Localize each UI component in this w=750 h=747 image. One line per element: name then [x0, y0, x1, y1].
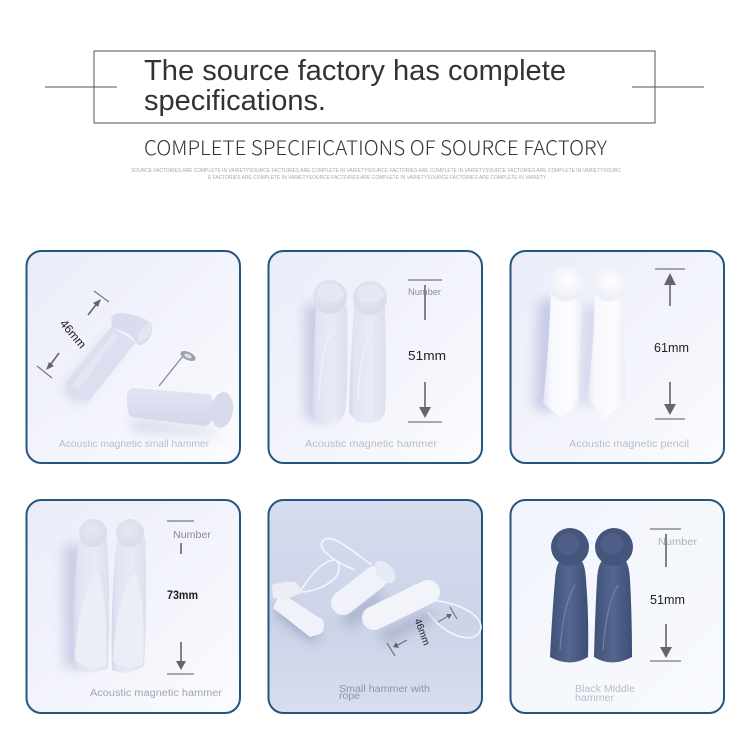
number label: Number — [173, 529, 211, 541]
header frame with side rules — [45, 51, 704, 123]
small descriptive text: SOURCE FACTORIES ARE COMPLETE IN VARIETYSOURCE FACTORIES ARE COMPLETE IN VARIETYSOURCE FACTORIES ARE COMPLETE IN VARIETYSOURCE FACTORIES ARE COMPLETE IN VARIETYSOURC — [131, 168, 621, 174]
icon: small hammer, angled — [62, 313, 155, 405]
arrow: height dimension — [655, 269, 685, 419]
icon: left hammer — [272, 582, 324, 642]
caption: rope — [339, 691, 360, 702]
small descriptive text — [131, 168, 621, 181]
panel: acoustic magnetic small hammer — [26, 251, 240, 463]
caption — [339, 684, 430, 702]
dimension label: 46mm — [57, 317, 89, 351]
caption: Acoustic magnetic hammer — [305, 439, 438, 450]
panel: acoustic magnetic pencil — [510, 251, 724, 463]
title: specifications. — [144, 85, 326, 117]
icon: right hammer — [374, 582, 440, 644]
panel: acoustic magnetic hammer, long — [26, 500, 240, 713]
panel: black middle hammer — [510, 500, 724, 713]
icon: small hammer with pin — [127, 349, 235, 436]
arrow: height dimension — [408, 280, 442, 422]
caption: hammer — [575, 693, 615, 704]
icon: middle hammer — [340, 557, 399, 628]
dimension label: 51mm — [408, 348, 446, 363]
title — [144, 55, 566, 117]
icon: ropes — [300, 538, 481, 638]
icon: pair of hammers — [305, 280, 387, 423]
arrow: dimension marks — [37, 291, 109, 378]
number label: Number — [658, 536, 698, 548]
dimension label: 51mm — [650, 592, 685, 607]
dimension label: 46mm — [412, 617, 431, 647]
icon: pair of dark hammers — [550, 528, 633, 662]
icon: pair of pencil tags — [534, 266, 626, 419]
panel: acoustic magnetic hammer — [268, 251, 482, 463]
icon: pair of long hammers — [64, 519, 146, 673]
caption: Black Middle — [575, 684, 635, 695]
caption: Small hammer with — [339, 684, 430, 695]
dimension label: 73mm — [167, 588, 198, 602]
caption — [575, 684, 635, 704]
subtitle: COMPLETE SPECIFICATIONS OF SOURCE FACTORY — [144, 132, 607, 161]
title: The source factory has complete — [144, 55, 566, 87]
arrow: dimension marks — [387, 607, 457, 656]
number label: Number — [408, 287, 441, 297]
caption: Acoustic magnetic small hammer — [59, 439, 210, 450]
caption: Acoustic magnetic pencil — [569, 439, 689, 450]
arrow: height dimension — [167, 521, 194, 674]
dimension label: 61mm — [654, 340, 689, 355]
caption: Acoustic magnetic hammer — [90, 688, 223, 699]
arrow: height dimension — [650, 529, 681, 661]
panel: small hammer with rope — [268, 500, 482, 713]
small descriptive text: E FACTORIES ARE COMPLETE IN VARIETYSOURCE FACTORIES ARE COMPLETE IN VARIETYSOURCE FACTORIES ARE COMPLETE IN VARIETY — [208, 175, 546, 181]
